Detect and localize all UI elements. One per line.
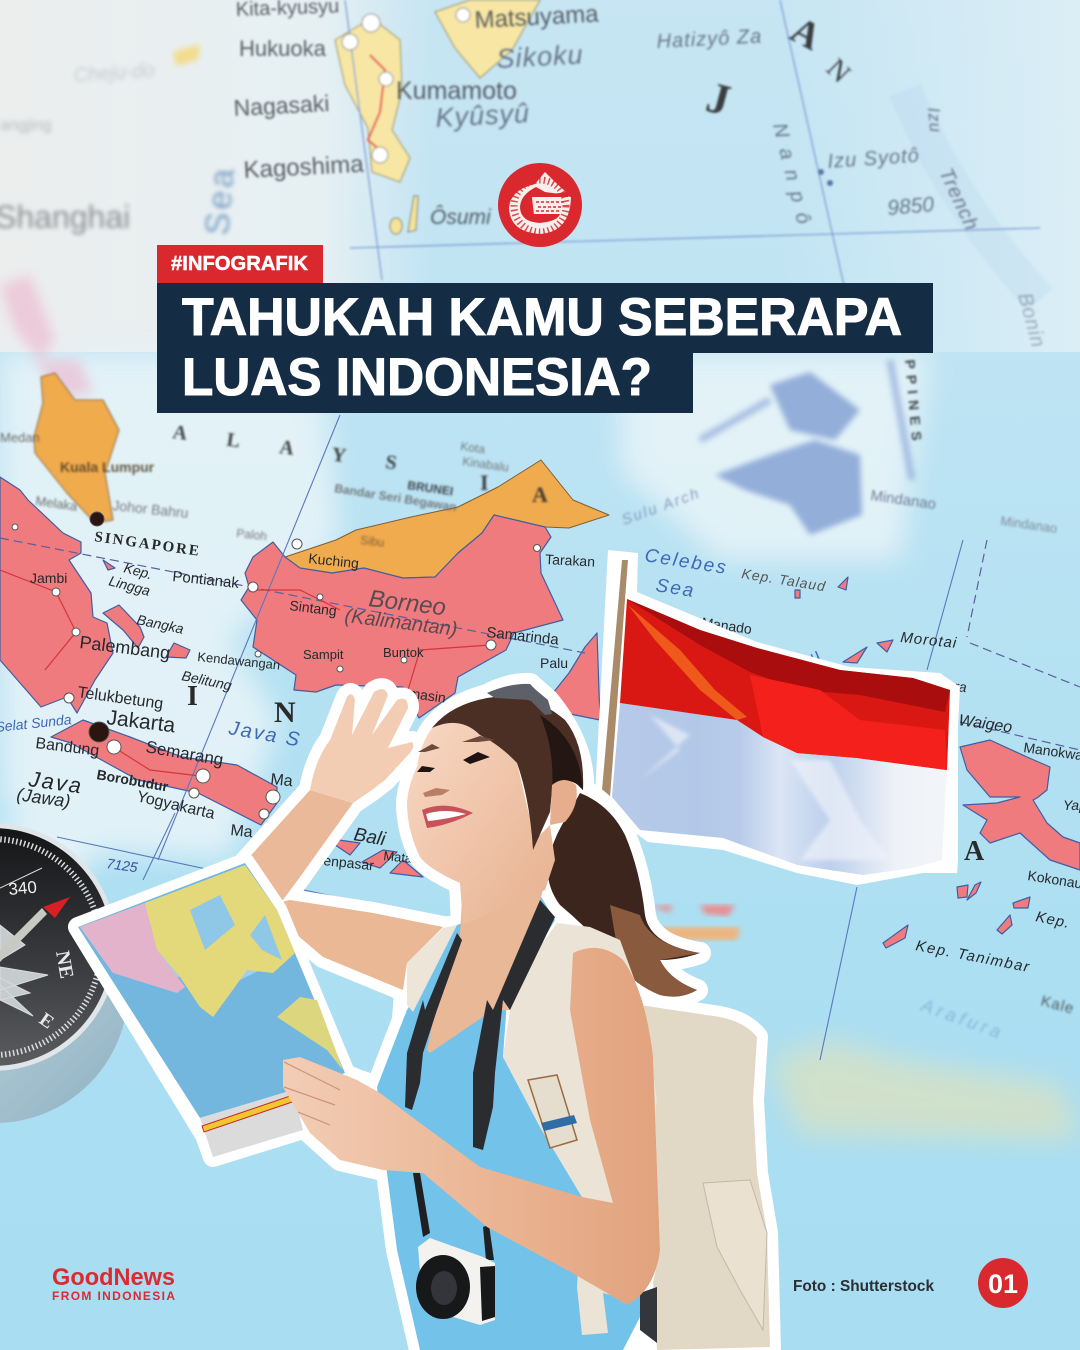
map of Indonesia: lines and labels: I bbox=[480, 470, 489, 495]
ear bbox=[550, 780, 577, 825]
map of Indonesia: lines and labels: Sea bbox=[654, 575, 697, 602]
map of Indonesia: lines and labels: Jambi bbox=[30, 570, 67, 586]
map of Indonesia: lines and labels: SINGAPORE bbox=[93, 529, 202, 560]
brand: GoodNews from Indonesia: GoodNews bbox=[52, 1264, 175, 1291]
hand-held map with sticker outline bbox=[78, 863, 345, 1157]
map of Indonesia: lines and labels: Java S bbox=[226, 717, 303, 752]
map of Indonesia: lines and labels: Jakarta bbox=[105, 706, 177, 737]
nose shadow bbox=[423, 788, 450, 797]
upper arm bbox=[277, 900, 443, 990]
camera bbox=[416, 1238, 495, 1325]
map of Indonesia: lines and labels: Kale bbox=[1039, 992, 1076, 1018]
map of Japan region (top): angjing bbox=[0, 117, 52, 134]
backpack shoulder strap bbox=[503, 923, 657, 1335]
land: Timor blurred bbox=[660, 927, 740, 940]
map of Indonesia: lines and labels: Tarakan bbox=[545, 551, 595, 570]
map of Japan region (top): Kyûsyû bbox=[435, 98, 531, 133]
map of Japan region (top): Izu bbox=[924, 107, 945, 134]
land: Thailand pink bbox=[0, 275, 93, 397]
land: Kalimantan bbox=[241, 515, 563, 718]
land: Bangka and Belitung bbox=[103, 560, 190, 658]
map of Japan region (top): 9850 bbox=[886, 193, 935, 220]
flag of Indonesia with sticker outline bbox=[595, 550, 960, 885]
title panel: TAHUKAH KAMU SEBERAPA bbox=[182, 288, 902, 347]
map of Japan region (top): A bbox=[784, 9, 828, 59]
map of Indonesia: land areas bbox=[0, 275, 1080, 1140]
hair bbox=[432, 696, 583, 850]
title panel: LUAS INDONESIA? bbox=[182, 348, 652, 407]
map of Indonesia: lines and labels: BRUNEI bbox=[407, 478, 454, 498]
land: Papua bbox=[960, 740, 1080, 870]
backpack bbox=[640, 1005, 770, 1350]
compass: 340 bbox=[8, 878, 38, 899]
map of Indonesia: lines and labels: ALAYS bbox=[171, 421, 438, 480]
brand: GoodNews from Indonesia: FROM INDONESIA bbox=[52, 1289, 175, 1303]
map of Indonesia: lines and labels: Kendawangan bbox=[197, 649, 281, 673]
photo credit: Foto : Shutterstock bbox=[793, 1278, 934, 1295]
compass: E bbox=[35, 1009, 58, 1033]
pale haze at top left of map bbox=[0, 0, 430, 352]
map of Indonesia: lines and labels bbox=[0, 359, 1080, 1060]
right arm and hand bbox=[283, 948, 660, 1305]
map of Japan region (top): Kumamoto bbox=[396, 77, 517, 105]
raised forearm bbox=[245, 790, 353, 908]
map of Japan region (top): Nagasaki bbox=[233, 90, 330, 121]
map of Indonesia: lines and labels: Halmahera bbox=[898, 672, 968, 695]
map of Indonesia: lines and labels: Mindanao bbox=[869, 487, 937, 513]
map of Indonesia: lines and labels: PPINES bbox=[902, 359, 926, 447]
map of Indonesia: lines and labels: Kep. Tanimbar bbox=[914, 937, 1032, 976]
land: Sabah and Sarawak bbox=[285, 460, 609, 578]
map of Indonesia: lines and labels: N bbox=[274, 696, 296, 729]
left shoulder strap bbox=[407, 925, 457, 1012]
map of Indonesia: lines and labels: Ma bbox=[270, 771, 294, 790]
white band bbox=[612, 703, 947, 875]
map of Indonesia: lines and labels: Mataram bbox=[383, 848, 435, 868]
map of Japan region (top): Trench bbox=[934, 165, 983, 235]
land: eastern islands bbox=[795, 577, 1030, 948]
neck and chest bbox=[427, 860, 545, 1053]
map of Indonesia: lines and labels: Samarinda bbox=[486, 624, 560, 649]
map of Indonesia: lines and labels: Morotai bbox=[900, 629, 958, 652]
map of Indonesia: lines and labels: Belitung bbox=[180, 667, 233, 693]
map of Indonesia: lines and labels: Pontianak bbox=[172, 568, 240, 592]
map of Japan region (top): Hatizyô Za bbox=[656, 25, 763, 53]
sticker outline of woman bbox=[245, 684, 770, 1350]
map of Japan region (top): Matsuyama bbox=[474, 1, 600, 34]
map of Indonesia: lines and labels: Bandar Seri Begawan bbox=[334, 481, 458, 514]
red band bbox=[620, 599, 950, 770]
map of Indonesia: lines and labels: Java bbox=[26, 766, 85, 799]
map of Japan region (top): Bonin bbox=[1013, 291, 1049, 351]
page number badge: 01 bbox=[988, 1269, 1018, 1299]
ponytail bbox=[548, 793, 700, 997]
raised hand bbox=[310, 689, 413, 803]
map of Japan region (top): Izu Syotô bbox=[827, 145, 921, 173]
brand: GoodNews from Indonesia bbox=[52, 1264, 175, 1303]
map of Japan region (top): Hukuoka bbox=[239, 36, 327, 61]
woman traveler bbox=[78, 684, 770, 1350]
map of Indonesia: lines and labels: Banjarmasin bbox=[368, 679, 447, 706]
map of Japan region (top): Sea bbox=[198, 164, 242, 237]
map of Japan region (top): Sikoku bbox=[496, 39, 584, 74]
map of Indonesia: lines and labels: A bbox=[532, 482, 548, 507]
map of Indonesia: lines and labels: Kep. bbox=[122, 559, 154, 582]
map of Indonesia: lines and labels: I bbox=[187, 681, 198, 712]
tag: #INFOGRAFIK bbox=[157, 245, 323, 283]
map of Indonesia: lines and labels: Kota bbox=[460, 439, 486, 456]
map of Indonesia: lines and labels: Buntok bbox=[383, 645, 424, 660]
page number badge bbox=[978, 1258, 1028, 1308]
map of Indonesia: lines and labels: Johor Bahru bbox=[112, 497, 189, 521]
land: Philippines (blurred) bbox=[715, 372, 862, 535]
map of Indonesia: lines and labels: Semarang bbox=[144, 737, 225, 770]
backpack pocket bbox=[703, 1180, 767, 1330]
map of Indonesia: lines and labels: Telukbetung bbox=[76, 684, 164, 713]
flag pole bbox=[602, 560, 628, 797]
map of Indonesia: lines and labels: Kuala Lumpur bbox=[60, 459, 155, 475]
map of Indonesia: lines and labels: Sibu bbox=[360, 533, 385, 549]
map of Indonesia: lines and labels: Ma bbox=[230, 822, 254, 841]
map of Indonesia: lines and labels: Palu bbox=[540, 655, 568, 671]
logo: Garuda G emblem bbox=[498, 163, 582, 247]
land: Sumatra bbox=[0, 477, 113, 713]
map of Indonesia: lines and labels: Lingga bbox=[107, 572, 152, 599]
smile bbox=[422, 806, 473, 828]
map of Japan region (top): Ôsumi bbox=[430, 206, 492, 229]
map of Indonesia: lines and labels: A bbox=[964, 836, 985, 867]
map of Indonesia: lines and labels: Kinabalu bbox=[462, 454, 510, 474]
map of Indonesia: lines and labels: Sulu Arch bbox=[620, 485, 703, 529]
map of Indonesia: lines and labels: Waigeo bbox=[957, 712, 1013, 736]
map of Indonesia: lines and labels: Celebes bbox=[643, 545, 729, 579]
map of Indonesia: lines and labels: Sintang bbox=[289, 597, 338, 619]
map of Japan region (top): Nanpô bbox=[768, 121, 817, 237]
map of Indonesia: lines and labels: Arafura bbox=[918, 995, 1007, 1044]
map of Indonesia: lines and labels: Kep. Talaud bbox=[741, 565, 827, 594]
map of Japan region (top): J bbox=[701, 72, 735, 125]
map of Indonesia: lines and labels: Borobudur bbox=[95, 766, 170, 795]
pale haze at top right of map bbox=[780, 0, 1080, 352]
map of Indonesia: lines and labels: 7125 bbox=[106, 855, 139, 875]
land: Bali, Lombok, Sumbawa bbox=[325, 838, 423, 877]
map of Indonesia: lines and labels: Kuching bbox=[308, 550, 360, 571]
map of Indonesia: lines and labels: Sampit bbox=[303, 647, 344, 662]
land: Java bbox=[51, 720, 277, 825]
tag: #INFOGRAFIK: #INFOGRAFIK bbox=[171, 253, 309, 275]
land: Malay peninsula bbox=[34, 373, 119, 523]
pale continental shelf bbox=[0, 352, 930, 900]
map of Indonesia: lines and labels: Paloh bbox=[236, 526, 268, 543]
map of Japan region (top): N bbox=[820, 53, 856, 89]
map of Indonesia: lines and labels: (Jawa) bbox=[15, 784, 72, 811]
map of Indonesia: lines and labels: Melaka bbox=[35, 493, 79, 514]
map of Indonesia: lines and labels: Bangka bbox=[135, 611, 185, 637]
tank top bbox=[377, 895, 640, 1350]
map of Indonesia: lines and labels: Yogyakarta bbox=[135, 788, 216, 823]
compass bbox=[0, 823, 128, 1123]
map of Indonesia: lines and labels: Borneo bbox=[367, 585, 447, 621]
title panel bbox=[157, 283, 933, 413]
map of Japan region (top): Kagoshima bbox=[243, 151, 365, 184]
map of Japan region (top) bbox=[0, 0, 1049, 351]
map of Indonesia: lines and labels: Bali bbox=[352, 824, 388, 851]
camera strap bbox=[473, 900, 555, 1150]
map of Indonesia: lines and labels: Bandung bbox=[35, 735, 100, 760]
sunglasses on head bbox=[487, 684, 552, 715]
map of Indonesia: lines and labels: (Kalimantan) bbox=[343, 605, 459, 641]
map of Indonesia: lines and labels: Manado bbox=[701, 614, 753, 637]
map of Indonesia: lines and labels: Mindanao bbox=[1000, 513, 1058, 536]
face bbox=[407, 713, 555, 925]
map of Indonesia: lines and labels: Kep. bbox=[1034, 908, 1072, 932]
map of Indonesia: lines and labels: Surabaya bbox=[280, 809, 349, 833]
eyes and brows bbox=[417, 752, 490, 772]
strap buckle bbox=[528, 1075, 577, 1148]
land: Australia blurred bbox=[770, 1040, 1080, 1140]
map of Japan region (top): Cheju-do bbox=[73, 59, 155, 87]
map of Indonesia: lines and labels: Palembang bbox=[79, 632, 171, 663]
land: Sulawesi bbox=[553, 633, 600, 720]
compass: NE bbox=[51, 949, 78, 980]
map of Indonesia: lines and labels: Denpasar bbox=[313, 851, 375, 873]
map of Indonesia: lines and labels: Medan bbox=[0, 430, 40, 445]
map of Indonesia: lines and labels: Maluku bbox=[768, 646, 824, 693]
dark side of pack bbox=[640, 1287, 657, 1343]
